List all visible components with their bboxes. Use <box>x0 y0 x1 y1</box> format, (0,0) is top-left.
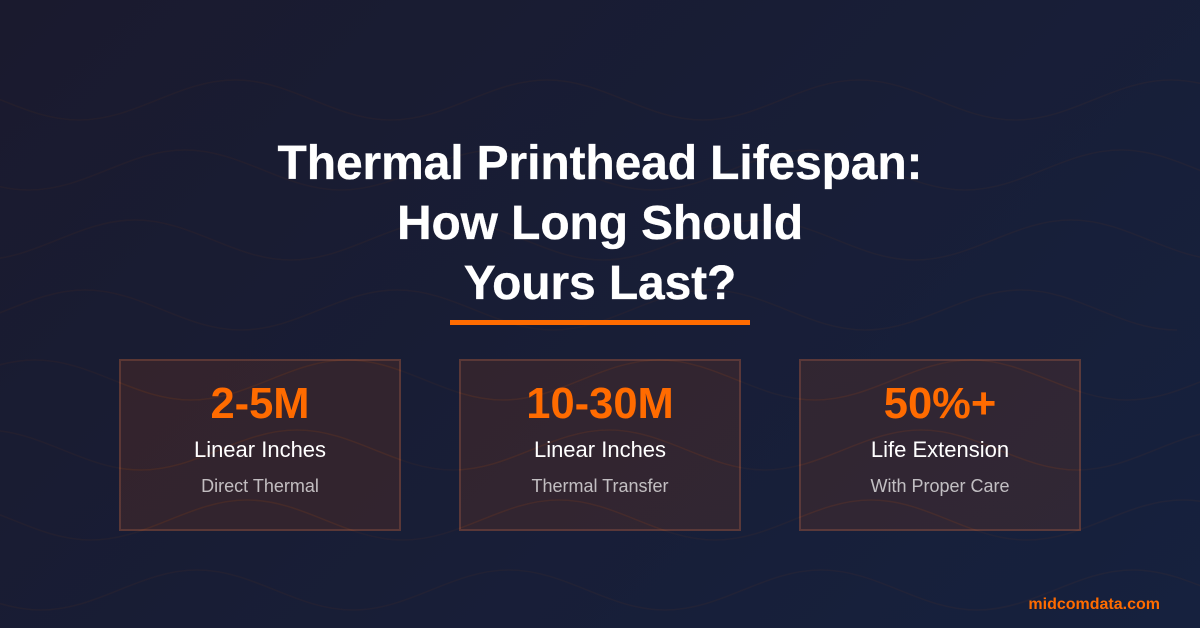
title: How Long Should <box>397 197 803 250</box>
panel: life extension stat <box>799 359 1081 531</box>
stat value: 2-5M <box>210 380 310 428</box>
stat value: 50%+ <box>884 380 996 428</box>
title: Yours Last? <box>464 257 736 310</box>
panel: direct thermal stat <box>119 359 401 531</box>
website brand: midcomdata.com <box>1028 596 1160 613</box>
title underline <box>450 320 750 325</box>
title: Thermal Printhead Lifespan: <box>278 137 922 190</box>
stat description: Thermal Transfer <box>531 476 669 496</box>
stat label: Linear Inches <box>194 437 326 462</box>
stat description: Direct Thermal <box>201 476 319 496</box>
stat value: 10-30M <box>526 380 674 428</box>
stat label: Linear Inches <box>534 437 666 462</box>
stat label: Life Extension <box>871 437 1009 462</box>
stat description: With Proper Care <box>870 476 1010 496</box>
panel: thermal transfer stat <box>459 359 741 531</box>
title <box>278 137 922 310</box>
